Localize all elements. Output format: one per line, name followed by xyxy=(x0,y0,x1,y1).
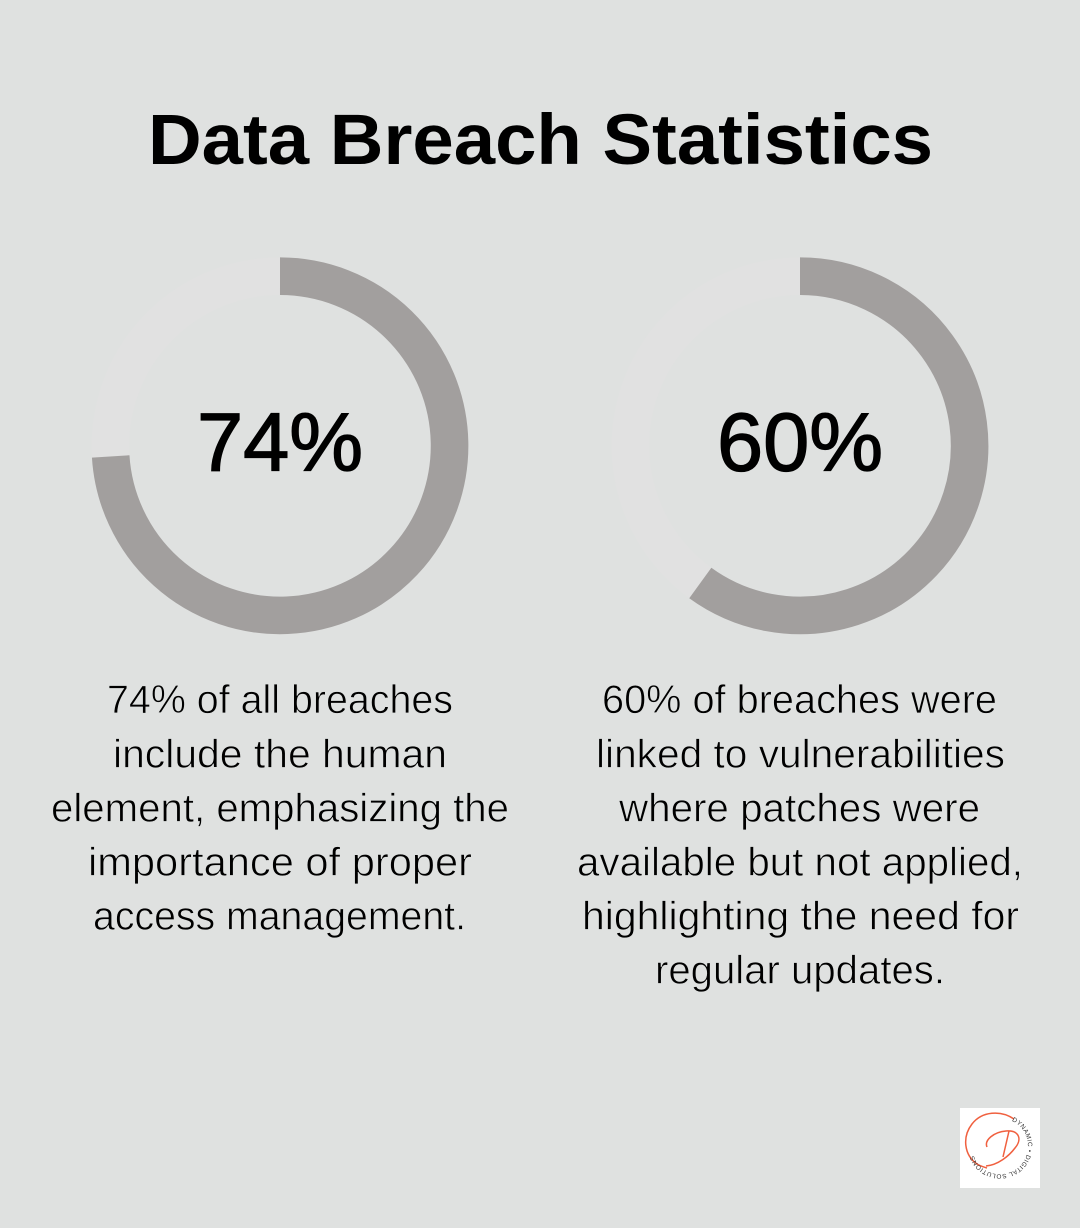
text block: 60% description xyxy=(577,678,1023,992)
text block: 60% description: highlighting the need for xyxy=(582,894,1019,938)
donut chart: 74% xyxy=(110,276,450,615)
text block: 60% description: available but not applied, xyxy=(577,840,1023,884)
donut chart: 74%: 74% xyxy=(197,396,363,489)
donut chart: 60%: 60% xyxy=(717,396,883,489)
donut chart: 60% xyxy=(630,276,970,615)
text block: 74% description: access management. xyxy=(93,894,466,938)
title: Data Breach Statistics xyxy=(148,101,933,180)
text block: 74% description xyxy=(51,678,509,938)
text block: 74% description: include the human xyxy=(113,732,447,776)
text block: 74% description: 74% of all breaches xyxy=(107,678,453,722)
logo: Dynamic Digital Solutions: DYNAMIC • DIGITAL SOLUTIONS xyxy=(970,1117,1032,1179)
text block: 60% description: 60% of breaches were xyxy=(602,678,997,722)
text block: 74% description: element, emphasizing the xyxy=(51,786,509,830)
text block: 60% description: linked to vulnerabilities xyxy=(596,732,1005,776)
text block: 60% description: regular updates. xyxy=(655,948,945,992)
text block: 60% description: where patches were xyxy=(618,786,980,830)
logo: Dynamic Digital Solutions xyxy=(960,1108,1040,1188)
text block: 74% description: importance of proper xyxy=(88,840,472,884)
